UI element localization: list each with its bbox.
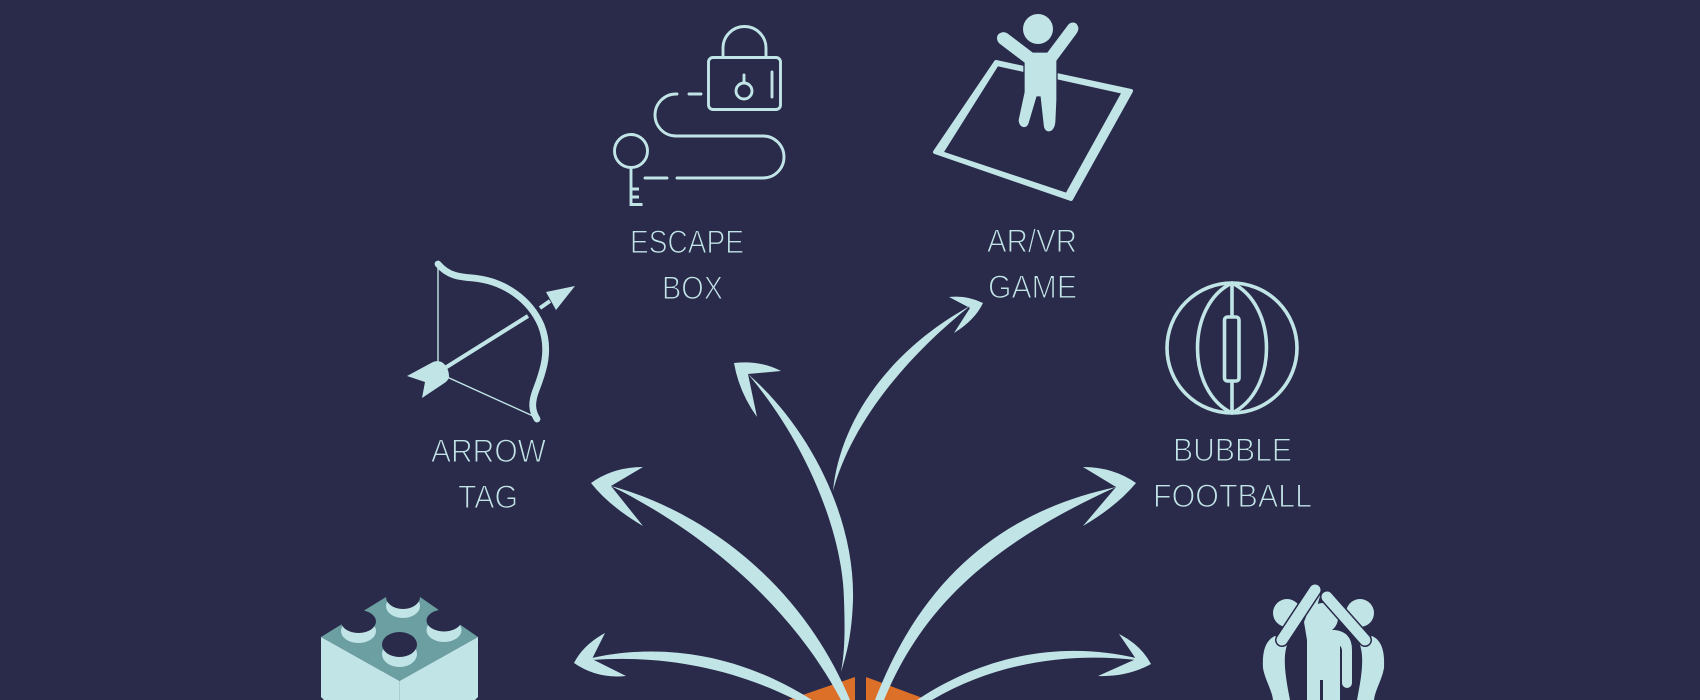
arrow to bubble football (875, 467, 1136, 700)
label: bubble football: FOOTBALL (1153, 478, 1312, 514)
icon: building block (321, 585, 478, 700)
label: arrow tag: ARROW (431, 433, 547, 469)
arrows fan (574, 297, 1151, 700)
central orange shape (788, 677, 928, 700)
activity: bubble football (1153, 283, 1312, 514)
label: AR/VR game: AR/VR (987, 223, 1077, 259)
label: arrow tag: TAG (458, 479, 518, 515)
arrow to escape box (734, 362, 853, 672)
icon: person on tilted screen (935, 14, 1131, 199)
activity: AR/VR game (935, 14, 1131, 305)
activity: arrow tag (407, 264, 575, 515)
icon: bubble ball (1167, 283, 1297, 413)
label: escape box: ESCAPE (630, 224, 744, 260)
label: bubble football: BUBBLE (1173, 432, 1292, 468)
arrow to team huddle (917, 634, 1151, 700)
icon: team huddle (1263, 590, 1384, 700)
arrow to arrow tag (591, 467, 850, 700)
label: AR/VR game: GAME (988, 269, 1077, 305)
arrow to building blocks (574, 633, 812, 700)
icon: padlock and key with path (614, 27, 784, 205)
arrow to AR/VR game (833, 297, 983, 491)
label: escape box: BOX (662, 270, 723, 306)
activity: escape box (614, 27, 784, 306)
icon: bow and arrow (407, 264, 575, 419)
